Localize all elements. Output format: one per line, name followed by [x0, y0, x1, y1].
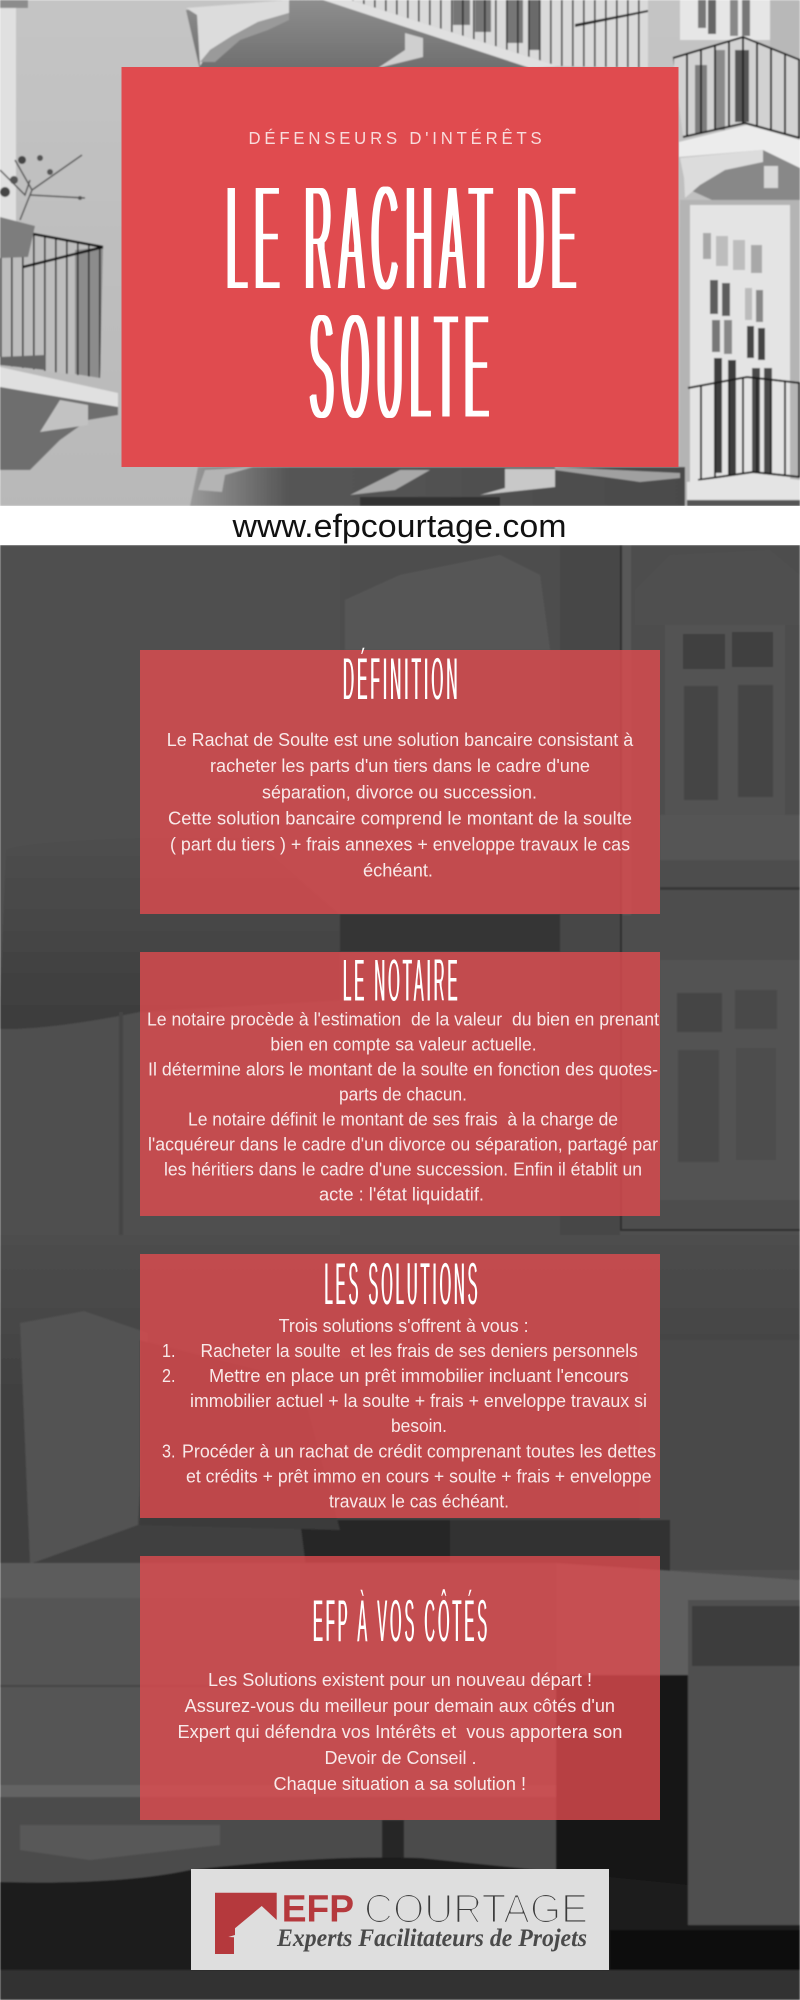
sofa and cushions: [0, 1235, 800, 1565]
definition text: échéant.: [363, 860, 433, 880]
solutions list: Racheter la soulte et les frais de ses deniers personnels: [200, 1341, 638, 1361]
definition text: [167, 730, 634, 880]
logo: efp courtage: COURTAGE: [364, 1886, 588, 1932]
logo wordmark: EFP: [282, 1889, 354, 1931]
notary text: acte : l'état liquidatif.: [319, 1185, 484, 1205]
eyebrow: DÉFENSEURS D'INTÉRÊTS: [248, 128, 546, 148]
definition text: ( part du tiers ) + frais annexes + enveloppe travaux le cas: [170, 834, 630, 854]
lower balcony under hero box: [190, 467, 685, 506]
closing text: Assurez-vous du meilleur pour demain aux côtés d'un: [185, 1696, 615, 1716]
rug and floor: [0, 1858, 800, 1985]
closing text: [178, 1670, 622, 1794]
solutions list: Trois solutions s'offrent à vous :: [279, 1316, 529, 1336]
notary text: parts de chacun.: [339, 1085, 467, 1105]
facade in window: [340, 545, 620, 1235]
main title: [226, 152, 584, 452]
right upper window: [680, 0, 770, 40]
notary text: Le notaire définit le montant de ses frais à la charge de: [188, 1110, 618, 1130]
closing text: Les Solutions existent pour un nouveau départ !: [208, 1670, 592, 1690]
top balcony railing: [351, 0, 648, 68]
hero panel: [122, 67, 678, 467]
website address: www.efpcourtage.com: [231, 508, 566, 544]
upper right balcony: [673, 37, 800, 138]
notary text: les héritiers dans le cadre d'une succession. Enfin il établit un: [164, 1160, 642, 1180]
right door with panes: [680, 200, 800, 506]
plant and pot: [0, 217, 35, 258]
definition text: racheter les parts d'un tiers dans le cadre d'une: [210, 756, 590, 776]
logo: efp courtage: [191, 1869, 609, 1970]
solutions list: immobilier actuel + la soulte + frais + enveloppe travaux si: [190, 1391, 647, 1411]
notary text: Le notaire procède à l'estimation de la valeur du bien en prenant: [147, 1010, 659, 1030]
solutions list: et crédits + prêt immo en cours + soulte + frais + enveloppe: [186, 1466, 652, 1486]
solutions list: 1.: [162, 1341, 176, 1361]
side table: [556, 1675, 688, 1885]
solutions list: Mettre en place un prêt immobilier incluant l'encours: [209, 1366, 629, 1386]
background photo: white balconies: [0, 0, 800, 506]
solutions list: 2.: [162, 1366, 176, 1386]
closing text: Chaque situation a sa solution !: [274, 1774, 526, 1794]
lower right balcony: [688, 377, 800, 480]
solutions list: 3.: [162, 1442, 176, 1462]
closing text: Devoir de Conseil .: [324, 1748, 476, 1768]
definition text: Cette solution bancaire comprend le montant de la soulte: [168, 808, 632, 828]
lamp: [0, 838, 340, 1029]
top balcony underside: [186, 0, 540, 70]
notary text: Il détermine alors le montant de la soulte en fonction des quotes-: [148, 1060, 658, 1080]
notary text: [147, 1010, 659, 1205]
left balcony: [0, 233, 103, 378]
background photo: dark interior: [0, 545, 800, 2000]
definition text: séparation, divorce ou succession.: [262, 782, 537, 802]
solutions list: besoin.: [391, 1416, 447, 1436]
closing text: Expert qui défendra vos Intérêts et vous apportera son: [178, 1722, 622, 1742]
icon: house corner: [215, 1893, 277, 1954]
solutions list: [162, 1316, 656, 1512]
panel: les solutions: [140, 1251, 660, 1518]
panel: définition: [140, 646, 660, 914]
solutions list: Procéder à un rachat de crédit comprenant toutes les dettes: [182, 1442, 656, 1462]
definition text: Le Rachat de Soulte est une solution bancaire consistant à: [167, 730, 634, 750]
left window trim: [0, 0, 16, 225]
notary text: l'acquéreur dans le cadre d'un divorce ou séparation, partagé par: [148, 1135, 658, 1155]
solutions list: travaux le cas échéant.: [329, 1492, 509, 1512]
panel: définition: DÉFINITION: [343, 646, 460, 712]
panel: le notaire: [140, 947, 660, 1216]
panel: efp à vos côtés: [140, 1556, 660, 1820]
website strip: [0, 506, 800, 545]
notary text: bien en compte sa valeur actuelle.: [270, 1035, 537, 1055]
logo tagline: Experts Facilitateurs de Projets: [276, 1925, 587, 1952]
